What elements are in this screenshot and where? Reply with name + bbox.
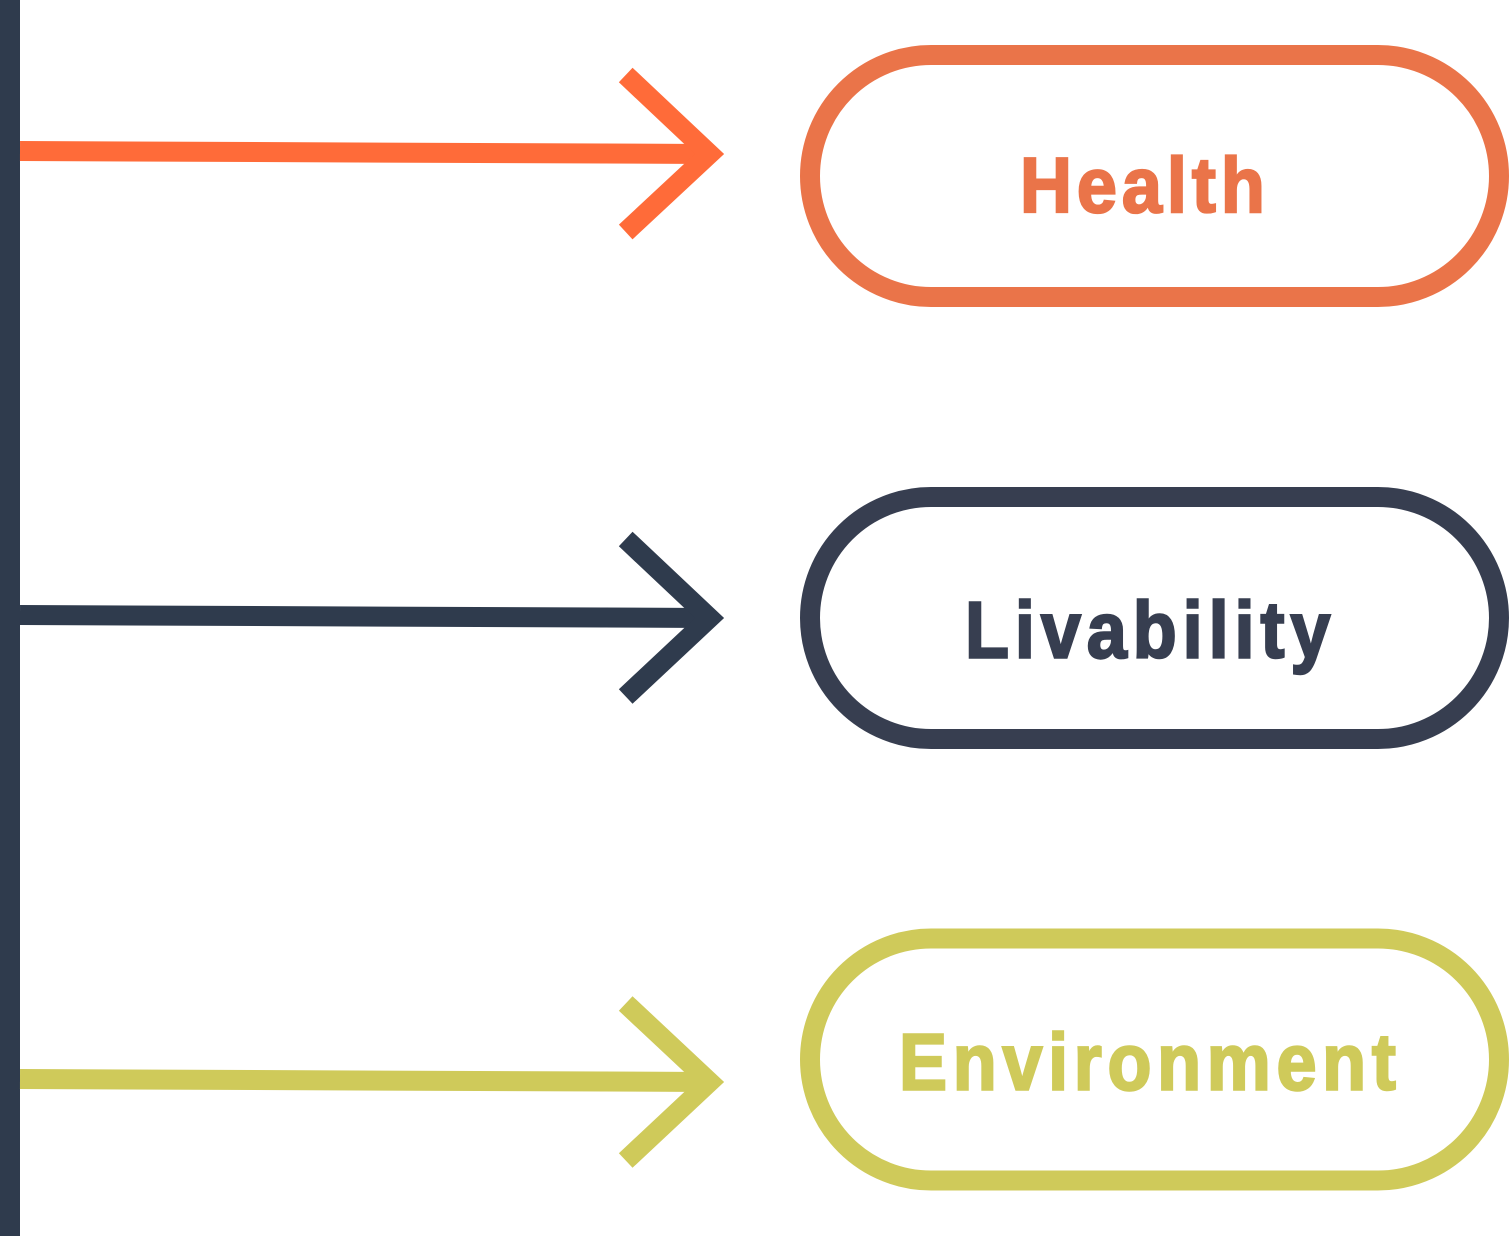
pill: Livability <box>810 497 1499 739</box>
vertical trunk line <box>0 0 20 1236</box>
label: Health: Health <box>1020 141 1265 229</box>
arrow: to Livability <box>20 539 710 696</box>
arrow: to Health <box>20 75 710 232</box>
pill: Environment <box>810 938 1499 1180</box>
arrow: to Environment <box>20 1004 710 1160</box>
pill: Health <box>810 55 1499 297</box>
label: Livability: Livability <box>965 586 1330 675</box>
label: Environment: Environment <box>899 1018 1396 1107</box>
